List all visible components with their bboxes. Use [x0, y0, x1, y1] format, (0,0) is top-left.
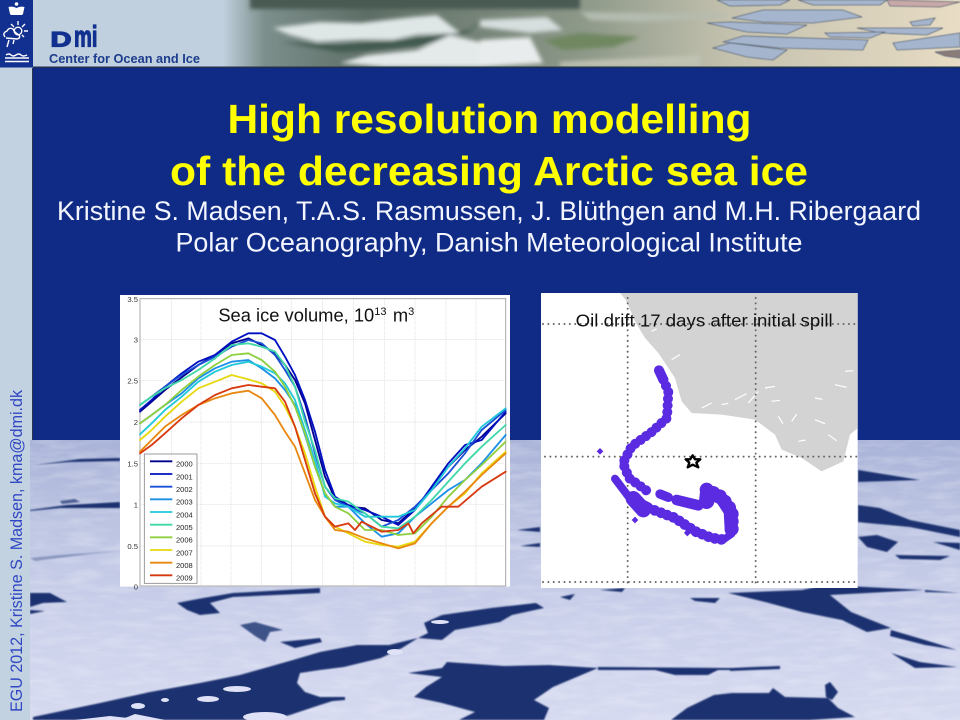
- dotted graticule: [543, 298, 858, 585]
- y axis labels: 3.5: [127, 295, 138, 304]
- legend: 2005: [176, 523, 193, 532]
- sidebar credit text: EGU 2012, Kristine S. Madsen, kma@dmi.dk: [8, 390, 26, 712]
- data lines by year: [140, 333, 506, 548]
- y axis labels: 0.5: [127, 542, 138, 551]
- icon: sun and rain cloud: [4, 21, 28, 47]
- title line 1: High resolution modelling: [228, 96, 752, 142]
- land mass: [620, 293, 858, 471]
- legend: [144, 454, 197, 583]
- legend: 2008: [176, 561, 193, 570]
- map title: Oil drift 17 days after initial spill: [576, 310, 833, 330]
- legend: 2004: [176, 510, 193, 519]
- y axis labels: [127, 295, 138, 592]
- header banner: sea and ice photo: [33, 0, 960, 68]
- legend: 2002: [176, 485, 193, 494]
- chart title: m: [388, 305, 408, 326]
- chart title: 3: [408, 306, 414, 318]
- legend: 2007: [176, 548, 193, 557]
- y axis labels: 1.5: [127, 459, 138, 468]
- y axis labels: 3: [134, 335, 138, 344]
- brand wordmark: DMI: mi: [74, 20, 98, 54]
- icon: waves: [5, 54, 29, 62]
- title block: [57, 96, 921, 258]
- blue title panel: [32, 68, 960, 440]
- ice pans: [707, 0, 960, 60]
- chart title: 13: [374, 306, 386, 318]
- brand wordmark: DMI: D: [50, 28, 72, 52]
- y axis labels: 2.5: [127, 377, 138, 386]
- chart title: Sea ice volume, 10: [218, 305, 374, 326]
- authors: Kristine S. Madsen, T.A.S. Rasmussen, J. Blüthgen and M.H. Ribergaard: [57, 196, 921, 226]
- legend: 2001: [176, 472, 193, 481]
- title line 2: of the decreasing Arctic sea ice: [170, 148, 808, 194]
- map: oil drift: [541, 293, 858, 588]
- icon: star marking spill origin: [686, 455, 700, 467]
- legend: 2009: [176, 574, 193, 583]
- chart: sea ice volume: [120, 295, 510, 592]
- affiliation: Polar Oceanography, Danish Meteorological Institute: [176, 228, 802, 258]
- legend: 2006: [176, 536, 193, 545]
- brand tagline: Center for Ocean and Ice: [49, 52, 200, 66]
- legend: 2003: [176, 498, 193, 507]
- y axis labels: 1: [134, 501, 138, 510]
- y axis labels: 2: [134, 418, 138, 427]
- brand wordmark: DMI: [50, 20, 98, 54]
- DMI logo column: [0, 0, 33, 68]
- y axis labels: 0: [134, 583, 138, 592]
- icon: crown: [8, 2, 24, 15]
- legend: 2000: [176, 460, 193, 469]
- oil spill drift track: [597, 370, 732, 540]
